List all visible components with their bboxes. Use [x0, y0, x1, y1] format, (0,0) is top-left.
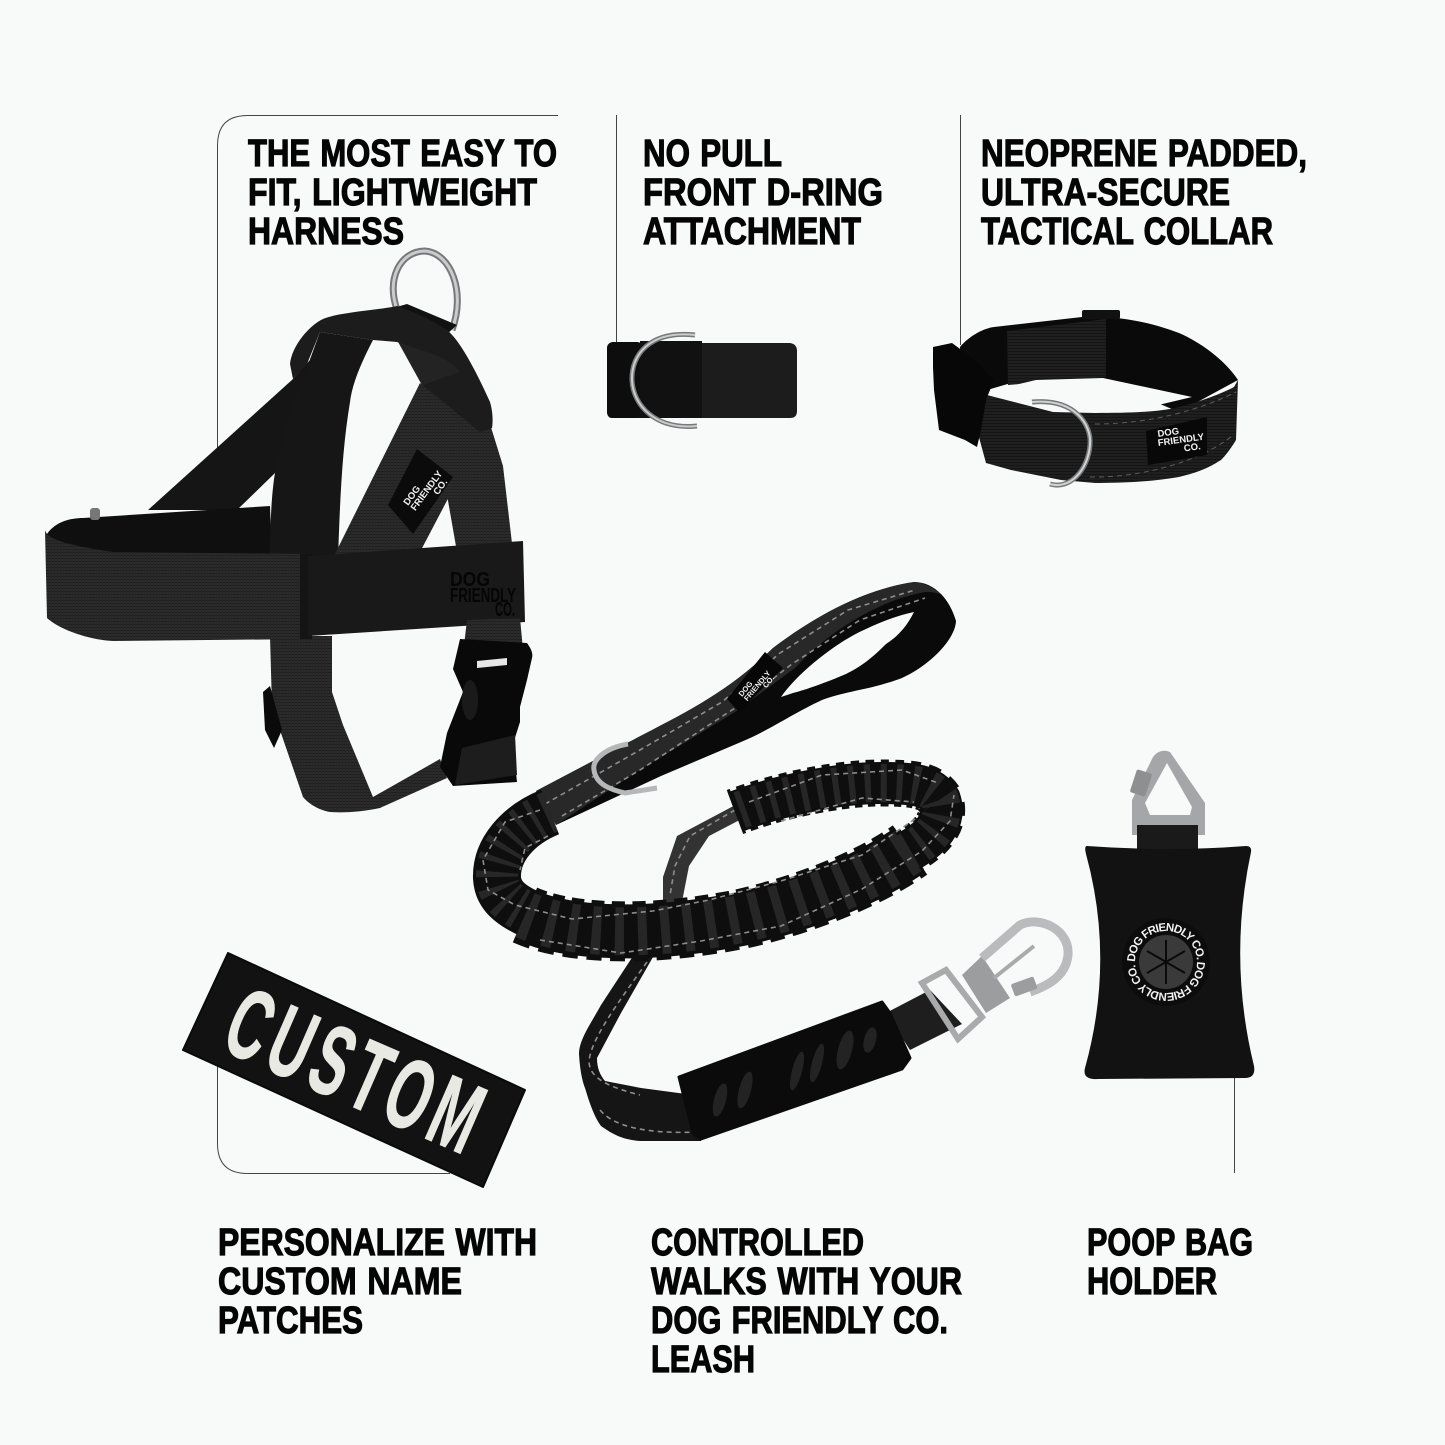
collar tag: FRIENDLY: [1157, 432, 1206, 449]
harness left shoulder strap: [270, 332, 373, 560]
harness slider: [263, 686, 282, 748]
heading: harness: THE MOST EASY TO: [248, 133, 557, 175]
collar tag: DOG: [1157, 426, 1180, 440]
harness top ring: [393, 251, 457, 330]
harness ring webbing: [393, 304, 457, 334]
harness woven tag: [388, 449, 453, 534]
product: harness: [45, 251, 532, 812]
harness leather label: CO.: [495, 599, 515, 621]
hanging strap: [1137, 825, 1198, 849]
leash handle tag: DOG: [737, 679, 755, 698]
harness right lower strap: [463, 618, 523, 654]
heading: leash: WALKS WITH YOUR: [651, 1261, 962, 1303]
collar tag: CO.: [1183, 441, 1201, 454]
heading: d-ring: ATTACHMENT: [643, 211, 861, 253]
harness leather label: DOG: [450, 569, 490, 591]
heading: harness: [248, 133, 557, 253]
collar rear webbing: [1007, 319, 1106, 385]
leash handle tag: CO.: [761, 674, 776, 690]
leash handle: [536, 582, 956, 825]
product: leash: [483, 582, 1068, 1141]
velcro tab: [607, 343, 797, 418]
silver d-ring: [632, 334, 697, 426]
heading: d-ring: [643, 133, 883, 253]
leash bungee section: [483, 770, 954, 953]
product: poop bag holder: [1084, 750, 1254, 1080]
collar d-ring: [1032, 402, 1090, 485]
harness padded top yoke: [290, 306, 493, 432]
round badge: DOG FRIENDLY CO. DOG FRIENDLY CO.: [1127, 923, 1205, 1001]
harness woven tag: CO.: [431, 477, 450, 497]
heading: collar: TACTICAL COLLAR: [981, 211, 1273, 253]
leash o-ring: [594, 744, 657, 793]
heading: leash: LEASH: [651, 1339, 755, 1381]
harness woven tag: FRIENDLY: [409, 468, 446, 513]
harness inner girth band: [47, 506, 272, 560]
product: custom name patch: CUSTOM: [210, 967, 505, 1178]
heading: poop bag holder: HOLDER: [1087, 1261, 1217, 1303]
heading: d-ring: NO PULL: [643, 133, 782, 175]
heading: name patches: CUSTOM NAME: [218, 1261, 462, 1303]
heading: name patches: [218, 1222, 537, 1342]
leash rubber grip: [679, 1002, 910, 1139]
product: d-ring patch: [607, 334, 797, 426]
collar front band: [977, 380, 1238, 483]
leash strap to hook: [886, 990, 962, 1050]
harness leather label: [308, 541, 525, 636]
heading: d-ring: FRONT D-RING: [643, 172, 883, 214]
heading: collar: ULTRA-SECURE: [981, 172, 1230, 214]
neoprene pouch: [1085, 846, 1254, 1079]
harness lower chest strap: [270, 636, 447, 812]
leash upper thin strap: [663, 802, 753, 912]
collar buckle: [933, 343, 994, 447]
heading: name patches: PERSONALIZE WITH: [218, 1222, 537, 1264]
heading: poop bag holder: [1087, 1222, 1253, 1303]
leash handle tag: FRIENDLY: [742, 669, 773, 703]
heading: name patches: PATCHES: [218, 1300, 363, 1342]
heading: collar: NEOPRENE PADDED,: [981, 133, 1307, 175]
collar neoprene back: [960, 317, 1238, 412]
harness back diagonal strap: [148, 360, 310, 510]
carabiner: [1132, 751, 1205, 835]
collar tag: [1146, 417, 1207, 465]
harness right strap with tag: [332, 383, 483, 560]
leash handle tag: [727, 652, 783, 712]
heading: collar: [981, 133, 1307, 253]
collar opening: [1002, 378, 1192, 412]
heading: harness: FIT, LIGHTWEIGHT: [248, 172, 537, 214]
heading: leash: DOG FRIENDLY CO.: [651, 1300, 948, 1342]
heading: leash: CONTROLLED: [651, 1222, 864, 1264]
heading: leash: [651, 1222, 962, 1381]
harness buckle: [440, 639, 532, 786]
product: tactical collar: [933, 310, 1238, 485]
harness leather label: FRIENDLY: [450, 585, 516, 607]
harness rear right strap: [447, 424, 513, 552]
heading: harness: HARNESS: [248, 211, 404, 253]
heading: poop bag holder: POOP BAG: [1087, 1222, 1253, 1264]
harness main band: [45, 530, 310, 641]
leash lower strap: [579, 950, 701, 1141]
leash swivel hook: [922, 922, 1068, 1039]
harness woven tag: DOG: [402, 484, 423, 508]
